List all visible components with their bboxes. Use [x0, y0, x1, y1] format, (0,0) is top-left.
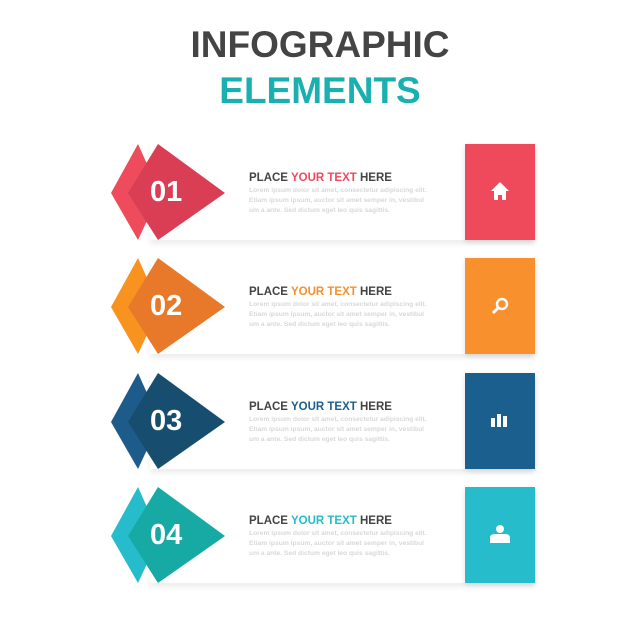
- arrow: 01: [111, 144, 225, 240]
- icon: home: [465, 144, 535, 240]
- number 04: 04: [150, 519, 182, 551]
- panel: row 04: [111, 487, 538, 588]
- icon: search: [465, 258, 535, 354]
- text block 02: PLACE YOUR TEXT HERE: [249, 286, 392, 298]
- arrow: 02: [111, 258, 225, 354]
- panel: row 01: [111, 144, 538, 245]
- subtitle: ELEMENTS: [219, 70, 421, 111]
- number 02: 02: [150, 290, 182, 322]
- text block 01: PLACE YOUR TEXT HERE: [249, 172, 392, 184]
- panel: row 04: Lorem ipsum dolor sit amet, consectetur adipiscing elit. Etiam ipsum ipsum, auctor sit amet semper in, vestibul um a ante. Sed dictum eget leo quis sagittis.: [249, 530, 427, 557]
- number 01: 01: [150, 176, 182, 208]
- arrow: 04: [111, 487, 225, 583]
- arrow: 03: [111, 373, 225, 469]
- icon: bar chart: [465, 373, 535, 469]
- panel: row 02: Lorem ipsum dolor sit amet, consectetur adipiscing elit. Etiam ipsum ipsum, auctor sit amet semper in, vestibul um a ante. Sed dictum eget leo quis sagittis.: [249, 301, 427, 328]
- title: INFOGRAPHIC: [190, 24, 450, 65]
- panel: row 03: Lorem ipsum dolor sit amet, consectetur adipiscing elit. Etiam ipsum ipsum, auctor sit amet semper in, vestibul um a ante. Sed dictum eget leo quis sagittis.: [249, 416, 427, 443]
- number 03: 03: [150, 405, 182, 437]
- panel: row 01: Lorem ipsum dolor sit amet, consectetur adipiscing elit. Etiam ipsum ipsum, auctor sit amet semper in, vestibul um a ante. Sed dictum eget leo quis sagittis.: [249, 187, 427, 214]
- text block 04: PLACE YOUR TEXT HERE: [249, 515, 392, 527]
- panel: row 03: [111, 373, 538, 474]
- icon: user: [465, 487, 535, 583]
- text block 03: PLACE YOUR TEXT HERE: [249, 401, 392, 413]
- panel: row 02: [111, 258, 538, 359]
